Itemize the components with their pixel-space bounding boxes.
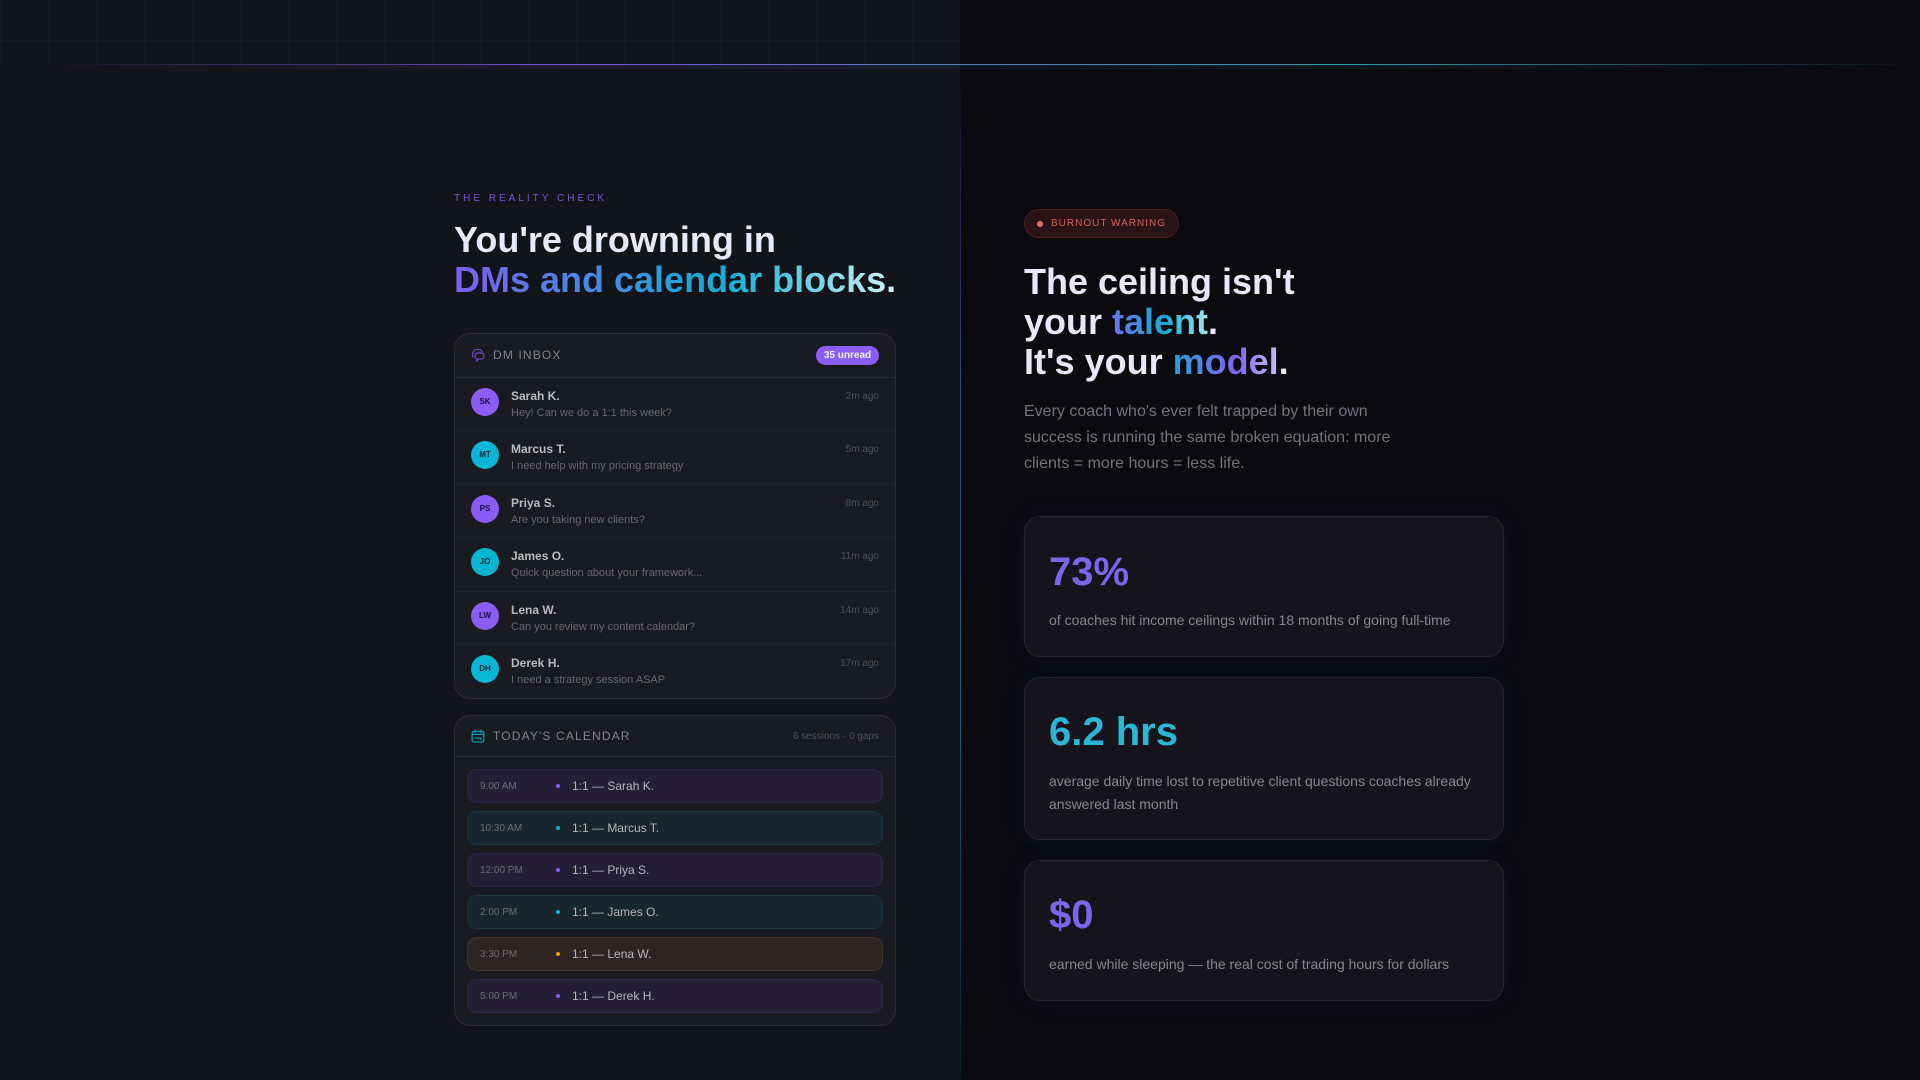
stat card: 73% [1024, 516, 1504, 657]
event: Derek: 1:1 — Derek H. [572, 989, 655, 1003]
message: James: James O. [511, 549, 564, 563]
icon: calendar [472, 730, 484, 743]
event: Priya: 12:00 PM [480, 865, 523, 876]
unread badge [816, 346, 879, 365]
message: Sarah: Hey! Can we do a 1:1 this week? [511, 407, 672, 419]
event: Marcus: 10:30 AM [480, 823, 522, 834]
message: Priya: Are you taking new clients? [511, 514, 645, 526]
stat description: of coaches hit income ceilings within 18 months of going full-time [1049, 612, 1451, 628]
heading: ceiling: The ceiling isn't [1024, 261, 1295, 302]
stat description: average daily time lost to repetitive client questions coaches already answered last month [1049, 773, 1471, 812]
message: Sarah: SK [479, 397, 491, 406]
message: Derek: 17m ago [840, 658, 879, 669]
event: James [467, 895, 883, 929]
panel: right background [960, 0, 1920, 1080]
badge label: BURNOUT WARNING [1051, 218, 1166, 229]
message: Derek: I need a strategy session ASAP [511, 674, 665, 686]
intro paragraph [1024, 403, 1390, 472]
intro paragraph: success is running the same broken equation: more [1024, 429, 1390, 446]
event: Sarah: 9:00 AM [480, 781, 517, 792]
heading: ceiling: It's your . [1024, 341, 1289, 382]
message: Marcus: Marcus T. [511, 442, 566, 456]
panel: left background [0, 0, 960, 1080]
event: Sarah [467, 769, 883, 803]
event: Marcus: 1:1 — Marcus T. [572, 821, 659, 835]
heading: ceiling: your . [1024, 301, 1218, 342]
event: Derek [467, 979, 883, 1013]
inbox title: DM INBOX [493, 348, 562, 362]
message: Sarah: 2m ago [846, 391, 879, 402]
inbox header [455, 334, 895, 378]
message: Lena: LW [479, 611, 491, 620]
message: James: Quick question about your framework... [511, 567, 702, 579]
event: Sarah: 1:1 — Sarah K. [572, 779, 654, 793]
calendar header [455, 716, 895, 757]
stat number: $0 [1049, 893, 1094, 937]
message: Priya [455, 485, 895, 538]
message: Derek: Derek H. [511, 656, 560, 670]
unread badge: 35 unread [824, 350, 871, 361]
message: Priya: PS [480, 504, 490, 513]
event: James: 1:1 — James O. [572, 905, 659, 919]
stat number: 6.2 hrs [1049, 710, 1178, 754]
intro paragraph: clients = more hours = less life. [1024, 455, 1245, 472]
message: Derek: DH [479, 664, 491, 673]
message: Marcus: I need help with my pricing strategy [511, 460, 683, 472]
message: Derek [471, 655, 879, 686]
event: Priya: 1:1 — Priya S. [572, 863, 649, 877]
panel: today's calendar [454, 715, 896, 1026]
icon: chat bubbles [472, 348, 484, 362]
event: Lena: 3:30 PM [480, 949, 517, 960]
stat card: 6.2 hrs [1024, 677, 1504, 840]
event: Priya [467, 853, 883, 887]
calendar title: TODAY'S CALENDAR [493, 729, 631, 743]
message: Priya: 8m ago [846, 498, 879, 509]
message: Priya: Priya S. [511, 496, 555, 510]
event: Lena: 1:1 — Lena W. [572, 947, 651, 961]
center divider [960, 65, 961, 1080]
heading: drowning: You're drowning in [454, 219, 776, 260]
eyebrow: THE REALITY CHECK [454, 193, 607, 204]
heading: drowning [454, 219, 896, 300]
stat description: earned while sleeping — the real cost of trading hours for dollars [1049, 956, 1449, 972]
panel: DM inbox [454, 333, 896, 699]
stat number: 73% [1049, 550, 1129, 594]
heading: drowning: DMs and calendar blocks. [454, 259, 896, 300]
message: Lena: Can you review my content calendar? [511, 621, 695, 633]
stat card: $0 [1024, 860, 1504, 1001]
burnout warning badge [1024, 209, 1179, 238]
event: Derek: 5:00 PM [480, 991, 517, 1002]
accent line glow [0, 65, 1920, 69]
message: Lena: Lena W. [511, 603, 556, 617]
heading: ceiling: model [1173, 341, 1279, 382]
message: Sarah [455, 378, 895, 431]
heading: ceiling [1024, 261, 1295, 382]
message: James [455, 538, 895, 592]
sessions summary: 6 sessions · 0 gaps [793, 731, 879, 742]
event: James: 2:00 PM [480, 907, 517, 918]
message: Marcus: 5m ago [846, 444, 879, 455]
message: Lena: 14m ago [840, 605, 879, 616]
message: Lena [455, 592, 895, 645]
grid header [0, 0, 960, 64]
heading: ceiling: talent [1112, 301, 1208, 342]
top accent line [0, 64, 1920, 65]
event: Lena [467, 937, 883, 971]
intro paragraph: Every coach who's ever felt trapped by their own [1024, 403, 1368, 420]
message: James: JO [480, 557, 490, 566]
message: Marcus: MT [479, 450, 491, 459]
message: Marcus [455, 431, 895, 485]
message: James: 11m ago [841, 551, 879, 562]
icon: warning dot [1037, 221, 1043, 227]
message: Sarah: Sarah K. [511, 389, 560, 403]
event: Marcus [467, 811, 883, 845]
